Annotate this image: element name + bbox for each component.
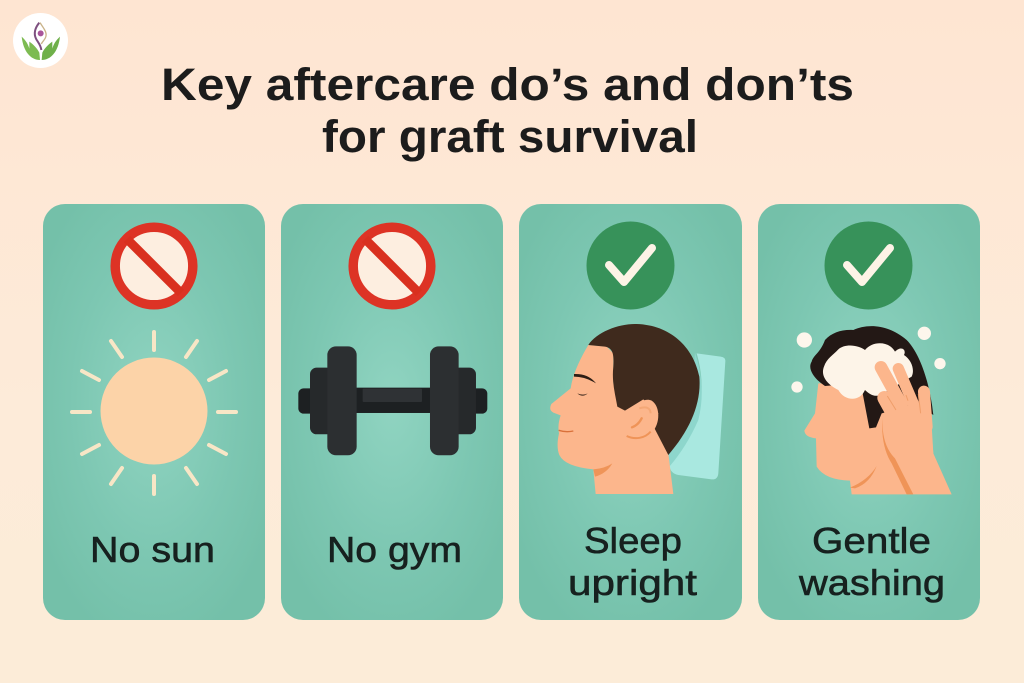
title: Key aftercare do’s and don’ts <box>161 59 854 110</box>
title: for graft survival <box>322 111 698 162</box>
label: no sun: No sun <box>90 529 215 570</box>
label: gentle washing <box>798 520 945 603</box>
illustration: washing hair <box>791 326 952 494</box>
label: sleep upright: Sleep <box>584 520 682 561</box>
panel: no sun <box>43 204 265 620</box>
panel: gentle washing <box>758 204 980 620</box>
panel: sleep upright <box>519 204 742 620</box>
icon: dumbbell <box>298 346 487 455</box>
label: sleep upright: upright <box>568 562 697 603</box>
icon: prohibition sign <box>353 227 431 305</box>
label: no gym: No gym <box>327 529 462 570</box>
icon: check badge <box>586 222 674 310</box>
icon: check badge <box>824 222 912 310</box>
icon: prohibition sign <box>115 227 193 305</box>
icon: sun <box>72 332 236 494</box>
panel: no gym <box>281 204 503 620</box>
title <box>161 59 854 162</box>
logo <box>13 13 68 68</box>
label: gentle washing: washing <box>798 562 945 603</box>
label: gentle washing: Gentle <box>812 520 931 561</box>
label: sleep upright <box>568 520 697 603</box>
illustration: sleeping head on pillow <box>550 324 725 494</box>
